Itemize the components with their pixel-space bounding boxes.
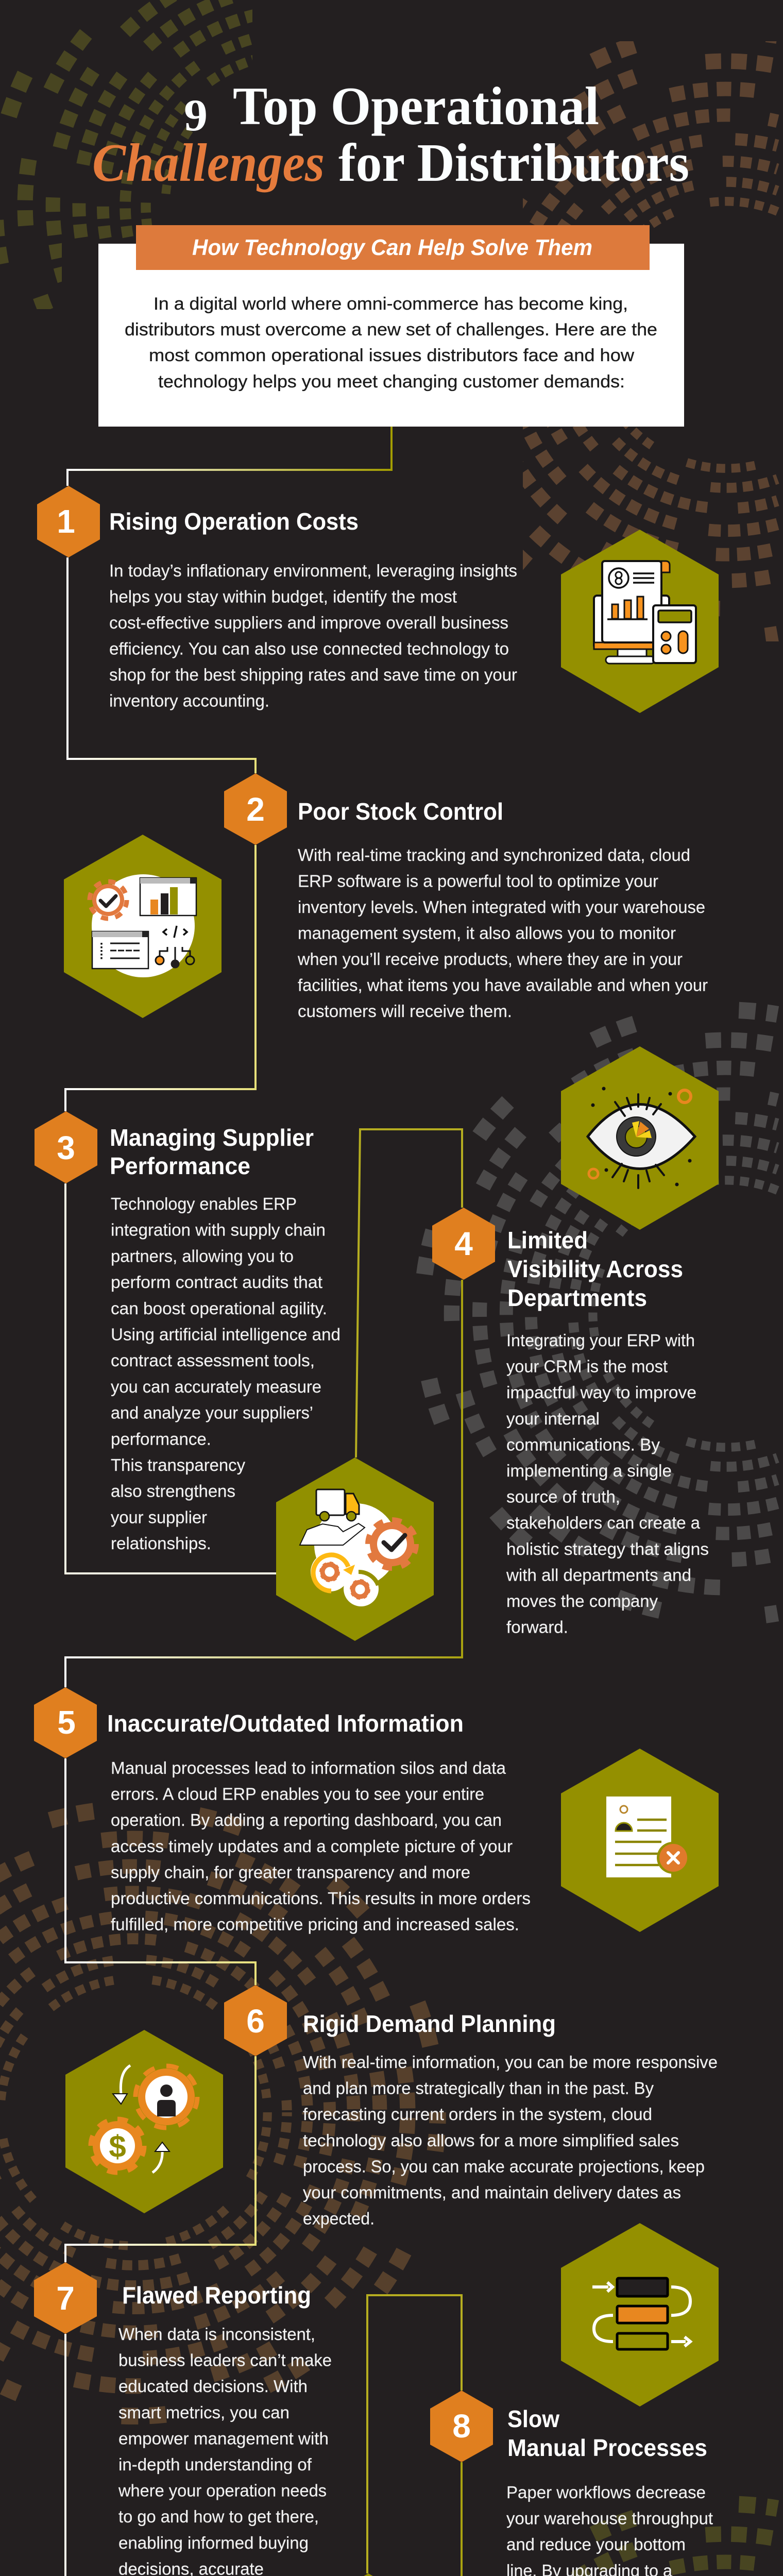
body 3: also strengthens <box>111 1482 235 1501</box>
body 6: expected. <box>303 2209 375 2228</box>
intro text <box>125 294 657 392</box>
body 4: holistic strategy that aligns <box>506 1539 709 1558</box>
icon: eye with pie chart <box>561 1046 719 1230</box>
body 7: business leaders can’t make <box>118 2351 332 2370</box>
panel: intro <box>98 225 684 427</box>
body 1: helps you stay within budget, identify the most <box>109 587 457 606</box>
body 5: operation. By adding a reporting dashboard, you can <box>111 1810 502 1829</box>
icon: people examining reports <box>290 2573 447 2576</box>
body 6: technology also allows for a more simplified sales <box>303 2131 679 2150</box>
body 1 <box>109 561 517 710</box>
number badge 5 <box>34 1687 97 1758</box>
number badge 2 <box>224 773 287 845</box>
body 8: Paper workflows decrease <box>506 2483 706 2502</box>
background pattern: brown left <box>0 1808 438 2416</box>
icon: process flow <box>561 2223 719 2406</box>
heading 4: Limited <box>507 1227 588 1253</box>
body 3: integration with supply chain <box>111 1221 326 1240</box>
number badge 6: 6 <box>246 2003 265 2040</box>
number badge 1 <box>37 486 100 557</box>
background pattern: gray right <box>422 1010 777 1618</box>
body 2: management system, it also allows you to monitor <box>298 923 676 943</box>
heading 7: Flawed Reporting <box>122 2282 311 2309</box>
title <box>92 76 689 193</box>
heading 3: Performance <box>110 1153 250 1179</box>
body 3: can boost operational agility. <box>111 1299 327 1318</box>
number badge 3 <box>35 1111 97 1183</box>
body 4: implementing a single <box>506 1461 672 1480</box>
body 2: inventory levels. When integrated with your warehouse <box>298 897 705 917</box>
intro text: In a digital world where omni-commerce has become king, <box>154 294 628 314</box>
body 7: smart metrics, you can <box>118 2403 290 2422</box>
icon: people and money gears <box>65 2030 223 2213</box>
body 2: With real-time tracking and synchronized data, cloud <box>298 845 690 865</box>
body 4: moves the company <box>506 1591 658 1611</box>
number badge 4: 4 <box>454 1225 473 1262</box>
step 3: managing supplier performance <box>35 1111 434 1641</box>
body 8: your warehouse throughput <box>506 2509 713 2528</box>
body 3: perform contract audits that <box>111 1273 322 1292</box>
icon: rejected document <box>561 1749 719 1932</box>
body 5: fulfilled, more competitive pricing and increased sales. <box>111 1915 519 1934</box>
body 3: performance. <box>111 1429 211 1448</box>
body 3 <box>111 1194 341 1553</box>
step 6: rigid demand planning <box>65 1985 718 2228</box>
body 4: your CRM is the most <box>506 1357 668 1376</box>
subtitle banner: How Technology Can Help Solve Them <box>192 235 592 260</box>
body 2 <box>297 845 708 1021</box>
body 3: and analyze your suppliers’ <box>111 1403 313 1422</box>
body 4: forward. <box>506 1618 568 1637</box>
body 8: and reduce your bottom <box>506 2535 686 2554</box>
title: Challenges <box>92 132 325 193</box>
number badge 7 <box>34 2262 97 2334</box>
body 5 <box>111 1758 531 1934</box>
body 4: Integrating your ERP with <box>506 1331 695 1350</box>
heading 8 <box>507 2405 707 2461</box>
body 5: access timely updates and a complete picture of your <box>111 1837 513 1856</box>
step 8: slow manual processes <box>430 2223 719 2576</box>
icon: report and calculator <box>561 530 719 713</box>
number badge 1: 1 <box>57 503 75 540</box>
number badge 3: 3 <box>57 1129 75 1166</box>
step 7: flawed reporting <box>34 2262 447 2576</box>
body 4 <box>506 1331 709 1637</box>
body 4: communications. By <box>506 1435 660 1454</box>
body 5: errors. A cloud ERP enables you to see your entire <box>111 1785 484 1804</box>
body 1: efficiency. You can also use connected technology to <box>109 639 509 658</box>
body 7: empower management with <box>118 2429 329 2448</box>
body 7: educated decisions. With <box>118 2377 308 2396</box>
body 5: supply chain, for greater transparency and more <box>111 1862 470 1882</box>
body 3: This transparency <box>111 1455 245 1475</box>
heading 8: Manual Processes <box>507 2434 707 2461</box>
body 7: enabling informed buying <box>118 2533 309 2552</box>
background pattern: olive top left <box>0 0 252 309</box>
intro text: most common operational issues distributors face and how <box>149 346 634 365</box>
body 4: impactful way to improve <box>506 1383 696 1402</box>
heading 3: Managing Supplier <box>110 1124 314 1151</box>
body 4: with all departments and <box>506 1565 691 1584</box>
number badge 8: 8 <box>452 2408 471 2445</box>
number badge 7: 7 <box>56 2280 75 2317</box>
body 7: When data is inconsistent, <box>118 2325 315 2344</box>
body 6: your commitments, and maintain delivery dates as <box>303 2183 681 2202</box>
step 1: rising operation costs <box>37 486 719 713</box>
step 4: limited visibility <box>432 1046 719 1637</box>
icon: software dashboard <box>64 835 222 1018</box>
title: for Distributors <box>338 132 689 193</box>
body 5: productive communications. This results in more orders <box>111 1889 531 1908</box>
body 1: shop for the best shipping rates and save time on your <box>109 665 517 684</box>
intro text: technology helps you meet changing customer demands: <box>158 372 625 392</box>
heading 1: Rising Operation Costs <box>109 508 359 535</box>
heading 8: Slow <box>507 2405 559 2432</box>
background pattern: olive lower right <box>422 2504 777 2576</box>
number badge 4 <box>432 1208 495 1280</box>
body 6: forecasting current orders in the system, cloud <box>303 2105 652 2124</box>
body 3: contract assessment tools, <box>111 1351 315 1370</box>
body 7: where your operation needs <box>118 2481 327 2500</box>
number badge 2: 2 <box>246 791 265 828</box>
body 4: stakeholders can create a <box>506 1513 701 1532</box>
heading 6: Rigid Demand Planning <box>303 2010 556 2037</box>
body 3: Using artificial intelligence and <box>111 1325 341 1344</box>
subtitle banner <box>136 225 650 270</box>
body 2: facilities, what items you have available and when your <box>298 976 708 994</box>
body 4: your internal <box>506 1409 600 1428</box>
step 5: inaccurate information <box>34 1687 719 1934</box>
body 1: cost-effective suppliers and improve overall business <box>109 613 508 632</box>
body 3: Technology enables ERP <box>111 1194 297 1213</box>
body 2: when you’ll receive products, where they are in your <box>297 950 683 969</box>
body 3: relationships. <box>111 1534 211 1553</box>
step 2: poor stock control <box>64 773 708 1021</box>
body 7: to go and how to get there, <box>118 2507 319 2526</box>
title: 9 <box>184 91 208 141</box>
body 1: inventory accounting. <box>109 691 269 710</box>
body 5: Manual processes lead to information silos and data <box>111 1758 506 1777</box>
body 7: in-depth understanding of <box>118 2455 312 2474</box>
icon: truck, hand and gears <box>276 1458 434 1641</box>
heading 3 <box>110 1124 314 1179</box>
heading 4: Departments <box>507 1284 647 1311</box>
number badge 8 <box>430 2391 493 2462</box>
heading 4 <box>507 1227 683 1311</box>
body 1: In today’s inflationary environment, leveraging insights <box>109 561 517 580</box>
body 2: ERP software is a powerful tool to optimize your <box>298 872 658 890</box>
body 4: source of truth, <box>506 1487 620 1506</box>
body 8 <box>506 2483 713 2576</box>
title: Top Operational <box>233 76 599 136</box>
body 6 <box>303 2053 718 2228</box>
heading 5: Inaccurate/Outdated Information <box>107 1710 464 1737</box>
body 3: partners, allowing you to <box>111 1246 294 1265</box>
body 2: customers will receive them. <box>298 1002 512 1021</box>
body 7 <box>118 2325 332 2576</box>
body 6: process. So, you can make accurate projections, keep <box>303 2157 705 2176</box>
number badge 5: 5 <box>57 1704 76 1741</box>
heading 4: Visibility Across <box>507 1256 683 1282</box>
body 6: and plan more strategically than in the past. By <box>303 2079 654 2098</box>
body 3: you can accurately measure <box>111 1377 321 1396</box>
connector lines <box>64 427 462 2576</box>
heading 2: Poor Stock Control <box>298 798 503 825</box>
body 3: your supplier <box>111 1507 207 1527</box>
number badge 6 <box>224 1985 287 2056</box>
icon: people and money gears: $ <box>109 2129 126 2164</box>
body 6: With real-time information, you can be more responsive <box>303 2053 718 2072</box>
background pattern: brown top right <box>523 41 779 641</box>
intro text: distributors must overcome a new set of challenges. Here are the <box>125 320 657 340</box>
